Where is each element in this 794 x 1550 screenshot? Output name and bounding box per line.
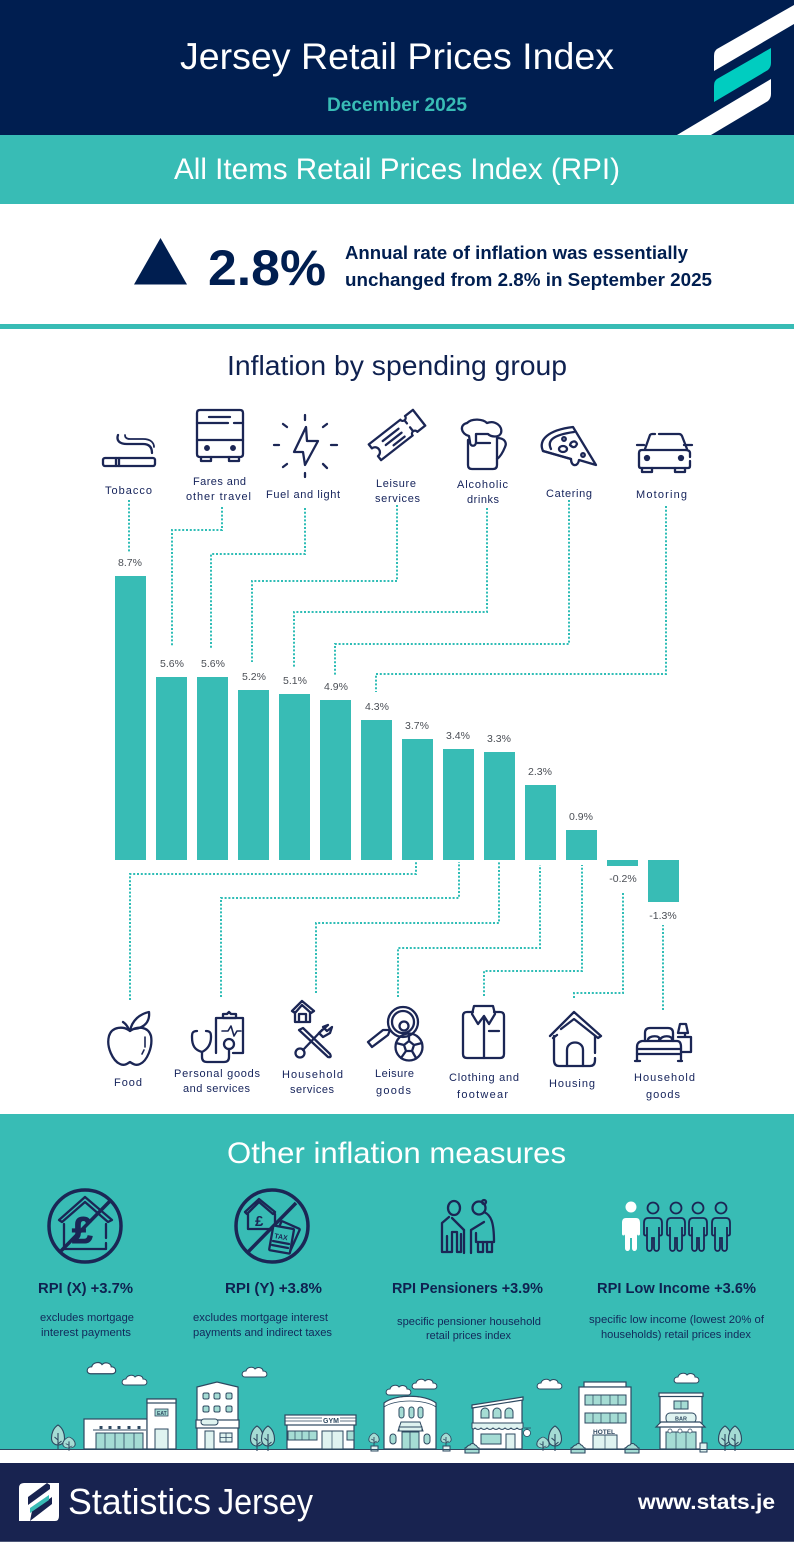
bar value labels: 4.9% xyxy=(324,681,348,693)
icon: house xyxy=(550,1012,601,1066)
icon: ticket xyxy=(369,410,425,460)
clouds xyxy=(87,1363,699,1395)
category labels: bottom: Housing xyxy=(549,1078,595,1090)
headline stat: 2.8% xyxy=(134,238,712,296)
building: cafe with curved roof xyxy=(384,1396,436,1449)
bar value labels: 3.3% xyxy=(487,733,511,745)
measure descriptions: interest payments xyxy=(41,1327,132,1339)
category labels: bottom xyxy=(114,1068,695,1101)
icon: tobacco xyxy=(103,435,155,466)
icon: pensioners xyxy=(442,1200,494,1253)
icon: up triangle xyxy=(134,238,187,284)
category labels: bottom: Household xyxy=(634,1072,695,1084)
planters and bushes xyxy=(371,1444,639,1453)
building: HOTEL xyxy=(579,1382,631,1449)
measure headings: RPI (X) +3.7% xyxy=(38,1281,133,1297)
date subtitle: December 2025 xyxy=(327,95,467,116)
icon: bus xyxy=(197,410,243,461)
icon: stethoscope and clipboard xyxy=(192,1012,243,1062)
category labels: top: Alcoholic xyxy=(457,479,508,491)
building: EAT: EAT xyxy=(157,1411,167,1417)
section band: all items RPI xyxy=(0,135,794,204)
measure descriptions: specific pensioner household xyxy=(397,1316,541,1328)
bars xyxy=(115,576,679,902)
icon: racket and ball xyxy=(368,1007,422,1060)
building: EAT xyxy=(84,1399,176,1449)
icon: RPI Y no mortgage or tax: TAX xyxy=(274,1233,288,1242)
measure headings xyxy=(38,1281,756,1297)
icon: header logo stripes xyxy=(677,5,794,135)
measure descriptions: excludes mortgage interest xyxy=(193,1312,328,1324)
heading: other inflation measures: Other inflation measures xyxy=(227,1137,566,1170)
icon: apple xyxy=(108,1012,151,1065)
bar value labels: -0.2% xyxy=(609,873,637,885)
footer website: www.stats.je xyxy=(637,1491,775,1514)
building: SHOP xyxy=(196,1382,239,1449)
icon: RPI Y no mortgage or tax xyxy=(236,1190,308,1262)
category labels: bottom: Clothing and xyxy=(449,1072,519,1084)
footer logo mark xyxy=(19,1483,59,1521)
bar value labels: 0.9% xyxy=(569,811,593,823)
building: awning shop xyxy=(472,1397,531,1449)
icon: shirt xyxy=(463,1006,504,1058)
building: GYM: GYM xyxy=(323,1418,339,1425)
bar value labels: 4.3% xyxy=(365,701,389,713)
footer wordmark xyxy=(68,1481,313,1522)
icon: RPI X no mortgage: £ xyxy=(72,1210,93,1251)
category labels: bottom: footwear xyxy=(457,1089,508,1101)
bar value labels: -1.3% xyxy=(649,910,677,922)
panel: other inflation measures xyxy=(0,1114,794,1450)
bar value labels: 3.4% xyxy=(446,730,470,742)
dotted connectors: bottom groups xyxy=(130,862,663,1010)
category labels: bottom: and services xyxy=(183,1083,250,1095)
category labels: bottom: Personal goods xyxy=(174,1068,260,1080)
measure headings: RPI (Y) +3.8% xyxy=(225,1281,322,1297)
measure descriptions: specific low income (lowest 20% of xyxy=(589,1314,765,1326)
category labels: top: drinks xyxy=(467,494,500,506)
category labels: top: services xyxy=(375,493,420,505)
measure descriptions: retail prices index xyxy=(426,1330,511,1342)
category labels: bottom: goods xyxy=(646,1089,680,1101)
building: GYM xyxy=(285,1415,356,1449)
bar value labels: 5.6% xyxy=(160,658,184,670)
footer band xyxy=(0,1463,794,1542)
category labels: bottom: Leisure xyxy=(375,1068,414,1080)
trees xyxy=(52,1425,742,1451)
category labels: top: other travel xyxy=(186,491,251,503)
building: BAR xyxy=(656,1393,707,1452)
icon: beer xyxy=(462,420,506,469)
illustration: street of buildings xyxy=(0,1363,794,1453)
icon: bed xyxy=(635,1024,691,1061)
bar value labels: 5.2% xyxy=(242,671,266,683)
ground line xyxy=(0,1449,794,1450)
measure descriptions: excludes mortgage xyxy=(40,1312,134,1324)
headline description: Annual rate of inflation was essentially xyxy=(345,242,689,263)
measure headings: RPI Low Income +3.6% xyxy=(597,1281,756,1297)
headline description xyxy=(345,242,712,290)
headline description: unchanged from 2.8% in September 2025 xyxy=(345,269,712,290)
measure descriptions: payments and indirect taxes xyxy=(193,1327,333,1339)
measure headings: RPI Pensioners +3.9% xyxy=(392,1281,543,1297)
category labels: top: Leisure xyxy=(376,478,416,490)
title: Jersey Retail Prices Index xyxy=(180,36,614,77)
bar value labels: 8.7% xyxy=(118,557,142,569)
icon: low income people xyxy=(622,1202,730,1251)
category labels: top: Motoring xyxy=(636,489,687,501)
measure descriptions: households) retail prices index xyxy=(601,1329,751,1341)
footer wordmark: Jersey xyxy=(218,1481,313,1522)
category labels: bottom: services xyxy=(290,1084,334,1096)
icon: lightning xyxy=(274,415,337,477)
category labels: bottom: Food xyxy=(114,1077,142,1089)
heading: inflation by spending group: Inflation by spending group xyxy=(227,350,567,381)
dotted connectors: top groups xyxy=(129,500,666,692)
headline figure: 2.8% xyxy=(208,240,326,296)
category labels: bottom: goods xyxy=(376,1085,412,1097)
icon: RPI X no mortgage xyxy=(49,1190,121,1262)
icon: pizza xyxy=(542,427,596,465)
category labels: bottom: Household xyxy=(282,1069,343,1081)
bar value labels: 2.3% xyxy=(528,766,552,778)
category labels: top: Tobacco xyxy=(105,485,152,497)
bar value labels: 5.6% xyxy=(201,658,225,670)
category labels: top: Catering xyxy=(546,488,592,500)
icon: house and tools xyxy=(292,1001,332,1058)
header band xyxy=(0,0,794,135)
category labels: top xyxy=(105,476,687,506)
footer wordmark: Statistics xyxy=(68,1481,211,1522)
bar value labels: 3.7% xyxy=(405,720,429,732)
bar chart xyxy=(115,557,679,922)
icon: RPI Y no mortgage or tax: £ xyxy=(255,1213,264,1230)
icon: car xyxy=(637,434,692,472)
building: HOTEL: HOTEL xyxy=(593,1429,615,1436)
bar value labels: 5.1% xyxy=(283,675,307,687)
building: BAR: BAR xyxy=(675,1416,687,1422)
measure descriptions xyxy=(40,1312,765,1342)
section band: all items RPI: All Items Retail Prices Index (RPI) xyxy=(174,153,620,186)
bar value labels xyxy=(118,557,677,922)
category labels: top: Fares and xyxy=(193,476,246,488)
category labels: top: Fuel and light xyxy=(266,489,340,501)
